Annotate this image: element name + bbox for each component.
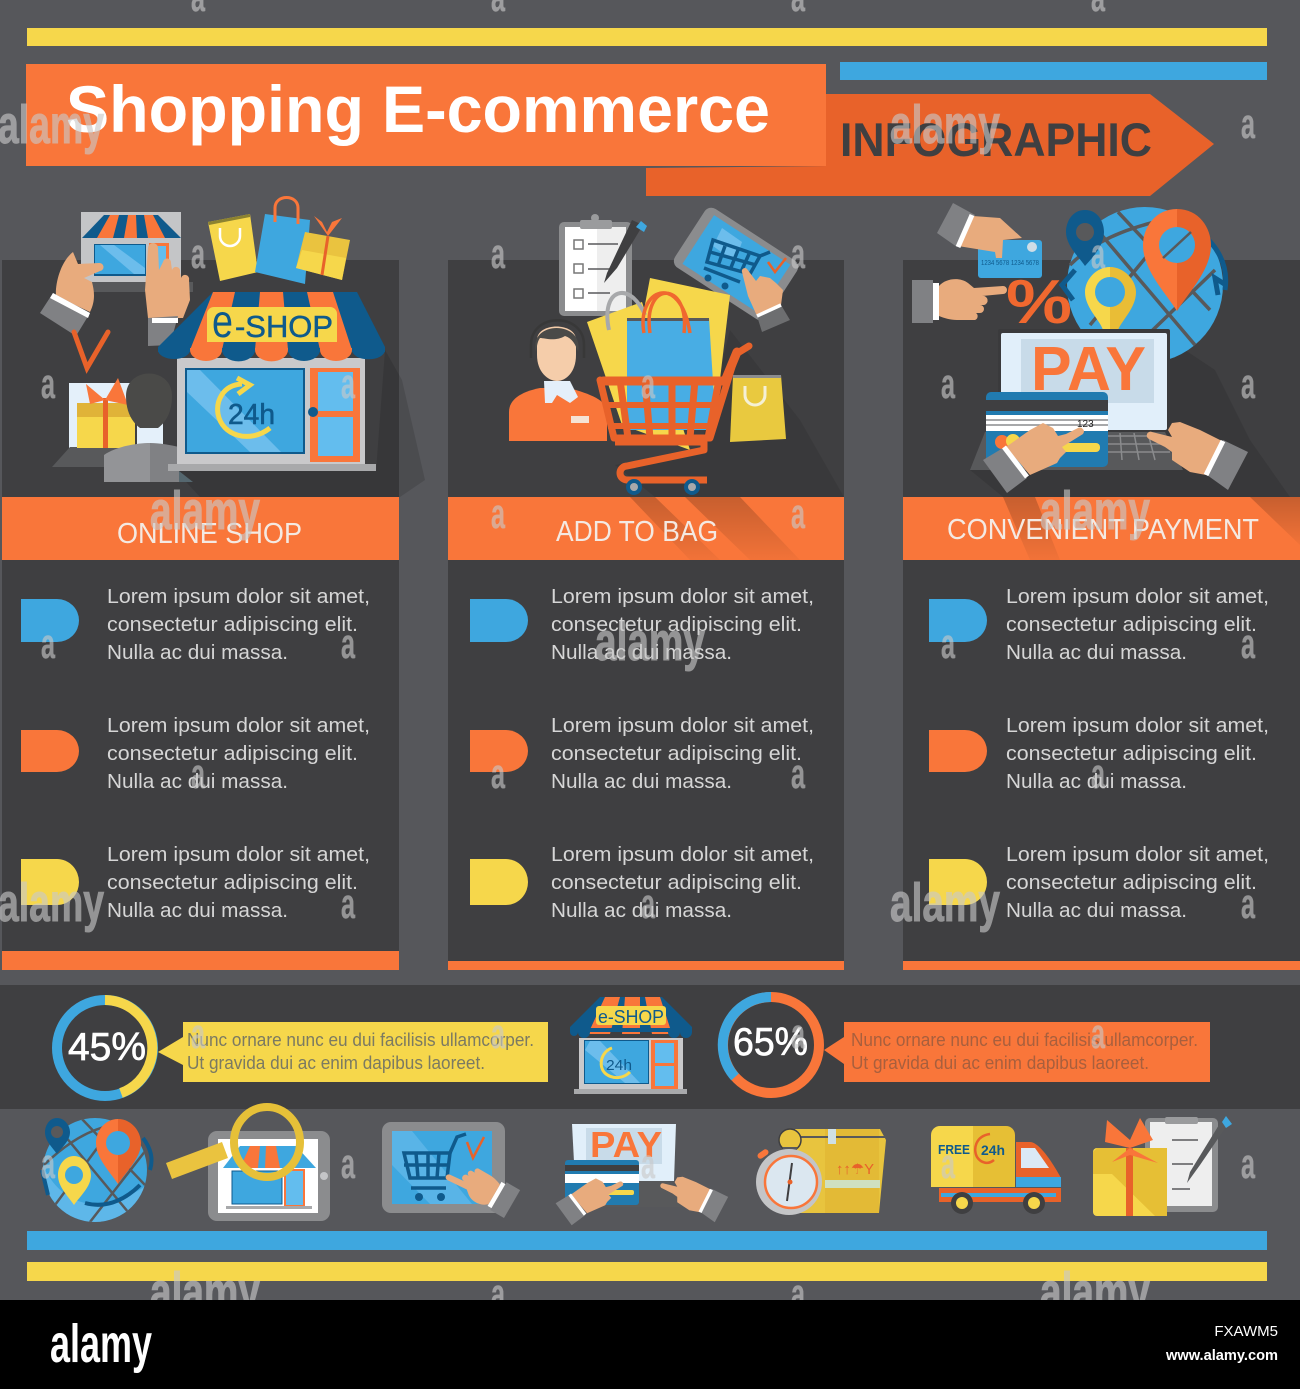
item 3 bbox=[21, 843, 370, 922]
watermark overlay: alamy bbox=[150, 1262, 260, 1322]
watermark overlay: alamy bbox=[890, 95, 1000, 155]
watermark overlay: a bbox=[1241, 620, 1255, 667]
watermark overlay: a bbox=[791, 1010, 805, 1057]
donut: 65%: 65% bbox=[733, 1021, 808, 1064]
icon: tablet with shop and hands bbox=[40, 212, 193, 346]
watermark overlay: a bbox=[341, 620, 355, 667]
percent sign: % bbox=[1006, 268, 1072, 337]
item 1 bbox=[21, 585, 370, 664]
icon: delivery truck bbox=[931, 1126, 1061, 1214]
icon: globe with pins bbox=[40, 1118, 152, 1230]
watermark overlay: a bbox=[1241, 880, 1255, 927]
bottom blue bar bbox=[27, 1231, 1267, 1250]
item 2: consectetur adipiscing elit. bbox=[107, 742, 358, 765]
title banner bbox=[26, 64, 826, 166]
icon: bank card bbox=[986, 392, 1108, 467]
illustration: add to bag bbox=[509, 205, 844, 497]
watermark overlay: a bbox=[791, 230, 805, 277]
illustration: convenient payment bbox=[912, 203, 1290, 497]
icon: pay laptop with card: PAY bbox=[590, 1124, 662, 1165]
icon: e-shop storefront: 24h bbox=[228, 399, 275, 431]
watermark overlay: a bbox=[191, 230, 205, 277]
icon: right hand bbox=[1147, 422, 1248, 490]
map pin blue bbox=[1066, 210, 1104, 266]
watermark overlay: a bbox=[41, 620, 55, 667]
icon: small e-shop: e-SHOP bbox=[598, 1007, 664, 1027]
item 1 bbox=[929, 585, 1269, 664]
icon: laptop with PAY bbox=[970, 329, 1183, 470]
item 3 bbox=[929, 843, 1269, 922]
top blue bar bbox=[840, 62, 1267, 80]
watermark overlay: a bbox=[941, 360, 955, 407]
item 1: Lorem ipsum dolor sit amet, bbox=[551, 585, 814, 608]
icon: shopping cart bbox=[600, 346, 749, 495]
icon: magnifier over tablet bbox=[169, 1107, 330, 1221]
item 3: Lorem ipsum dolor sit amet, bbox=[1006, 843, 1269, 866]
heading band: add to bag: ADD TO BAG bbox=[556, 516, 718, 548]
stats band bbox=[0, 985, 1300, 1109]
watermark overlay: a bbox=[341, 1140, 355, 1187]
watermark overlay: a bbox=[1091, 1010, 1105, 1057]
item 2 bbox=[929, 714, 1269, 793]
icon: pay laptop with card bbox=[556, 1124, 728, 1225]
callout: yellow bbox=[158, 1022, 548, 1082]
item 3: consectetur adipiscing elit. bbox=[107, 871, 358, 894]
long shadow bbox=[615, 330, 844, 497]
icon: delivery truck: 24h bbox=[981, 1142, 1005, 1158]
bottom yellow bar bbox=[27, 1262, 1267, 1281]
footer bar: FXAWM5 bbox=[1214, 1323, 1278, 1340]
heading band: convenient payment: CONVENIENT PAYMENT bbox=[947, 514, 1259, 546]
watermark overlay: a bbox=[491, 490, 505, 537]
icon: small e-shop: 24h bbox=[606, 1057, 632, 1074]
icon: yellow bag bbox=[730, 375, 786, 442]
item 1: Nulla ac dui massa. bbox=[107, 641, 288, 664]
icon: shopping bags and gift bbox=[208, 198, 350, 284]
item 1: Lorem ipsum dolor sit amet, bbox=[107, 585, 370, 608]
watermark overlay: a bbox=[491, 750, 505, 797]
watermark overlay: a bbox=[1241, 100, 1255, 147]
watermark overlay: a bbox=[1091, 750, 1105, 797]
icon: shopping bags bbox=[587, 278, 730, 450]
panel: online shop bbox=[2, 260, 399, 970]
watermark overlay: a bbox=[791, 1270, 805, 1317]
icon: bank card: 123 bbox=[1077, 419, 1094, 430]
item 2: Lorem ipsum dolor sit amet, bbox=[1006, 714, 1269, 737]
map pin orange bbox=[1143, 209, 1211, 311]
item 2: Lorem ipsum dolor sit amet, bbox=[107, 714, 370, 737]
watermark overlay: a bbox=[341, 360, 355, 407]
item 3: Nulla ac dui massa. bbox=[107, 899, 288, 922]
icon: laptop with PAY: PAY bbox=[1031, 335, 1146, 404]
item 1: Nulla ac dui massa. bbox=[551, 641, 732, 664]
watermark overlay: a bbox=[1241, 360, 1255, 407]
heading band: add to bag bbox=[448, 497, 844, 560]
watermark overlay: alamy bbox=[0, 95, 104, 155]
watermark overlay: a bbox=[641, 1140, 655, 1187]
callout: orange bbox=[824, 1022, 1210, 1082]
icon: customer at laptop with gift bbox=[52, 374, 193, 482]
illustration: online shop bbox=[40, 198, 425, 497]
footer bar bbox=[0, 1300, 1300, 1389]
icon: check mark bbox=[74, 332, 108, 368]
donut: 65% bbox=[723, 997, 819, 1093]
subtitle arrow banner: INFOGRAPHIC bbox=[840, 113, 1152, 166]
long shadow bbox=[176, 350, 425, 497]
watermark overlay: a bbox=[941, 1140, 955, 1187]
icon: delivery truck: FREE bbox=[938, 1142, 970, 1157]
top yellow bar bbox=[27, 28, 1267, 46]
watermark overlay: alamy bbox=[890, 873, 1000, 933]
subtitle arrow banner bbox=[646, 94, 1214, 196]
footer bar: alamy bbox=[50, 1314, 152, 1374]
item 2: Nulla ac dui massa. bbox=[1006, 770, 1187, 793]
shop sign bbox=[207, 295, 337, 347]
icon: tablet with cart bbox=[671, 205, 801, 332]
watermark overlay: alamy bbox=[1040, 481, 1150, 541]
watermark overlay: a bbox=[1241, 1140, 1255, 1187]
icon: call centre agent bbox=[509, 320, 607, 441]
watermark overlay: alamy bbox=[0, 873, 104, 933]
watermark overlay: a bbox=[41, 1140, 55, 1187]
watermark overlay: a bbox=[191, 750, 205, 797]
panel: convenient payment bbox=[903, 260, 1300, 970]
item 1: Nulla ac dui massa. bbox=[1006, 641, 1187, 664]
item 2 bbox=[470, 714, 814, 793]
icon: globe with map pins bbox=[1062, 207, 1226, 363]
icon row bbox=[40, 1107, 1232, 1230]
item 1: Lorem ipsum dolor sit amet, bbox=[1006, 585, 1269, 608]
watermark overlay: a bbox=[1091, 230, 1105, 277]
long shadow bbox=[970, 340, 1290, 497]
icon: stopwatch and parcel: ↑↑☂Y bbox=[836, 1161, 874, 1178]
item 3: Nulla ac dui massa. bbox=[1006, 899, 1187, 922]
icon: hands with credit card: 1234 5678 1234 5678 bbox=[981, 260, 1039, 267]
watermark overlay: a bbox=[641, 360, 655, 407]
watermark overlay: a bbox=[191, 1010, 205, 1057]
icon: gift and clipboard bbox=[1093, 1116, 1232, 1216]
heading band: online shop bbox=[2, 497, 399, 560]
icon: hands with credit card bbox=[912, 203, 1042, 323]
watermark overlay: alamy bbox=[150, 481, 260, 541]
item 3: Lorem ipsum dolor sit amet, bbox=[107, 843, 370, 866]
watermark overlay: alamy bbox=[595, 612, 705, 672]
item 3: Nulla ac dui massa. bbox=[551, 899, 732, 922]
item 2: Nulla ac dui massa. bbox=[551, 770, 732, 793]
item 2: Nulla ac dui massa. bbox=[107, 770, 288, 793]
watermark overlay: a bbox=[491, 1270, 505, 1317]
watermark overlay: a bbox=[791, 490, 805, 537]
callout: orange: Ut gravida dui ac enim dapibus laoreet. bbox=[851, 1052, 1149, 1073]
watermark overlay: a bbox=[41, 360, 55, 407]
item 1: consectetur adipiscing elit. bbox=[107, 613, 358, 636]
callout: yellow: Nunc ornare nunc eu dui facilisis ullamcorper. bbox=[187, 1029, 534, 1050]
icon: small e-shop bbox=[570, 997, 692, 1094]
watermark overlay: a bbox=[791, 750, 805, 797]
heading band: convenient payment bbox=[903, 497, 1300, 560]
item 3: consectetur adipiscing elit. bbox=[1006, 871, 1257, 894]
item 2 bbox=[21, 714, 370, 793]
shop sign: e bbox=[212, 295, 233, 347]
callout: orange: Nunc ornare nunc eu dui facilisis ullamcorper. bbox=[851, 1029, 1198, 1050]
item 1: consectetur adipiscing elit. bbox=[1006, 613, 1257, 636]
icon: e-shop storefront bbox=[158, 292, 385, 471]
watermark overlay: a bbox=[941, 620, 955, 667]
watermark overlay: a bbox=[641, 880, 655, 927]
watermark overlay: a bbox=[341, 880, 355, 927]
panel: add to bag bbox=[448, 260, 844, 970]
item 2: consectetur adipiscing elit. bbox=[551, 742, 802, 765]
map pin yellow bbox=[1085, 267, 1136, 330]
donut: 45%: 45% bbox=[68, 1026, 146, 1069]
watermark overlay: alamy bbox=[1040, 1262, 1150, 1322]
item 1 bbox=[470, 585, 814, 664]
item 2: Lorem ipsum dolor sit amet, bbox=[551, 714, 814, 737]
shop sign: -SHOP bbox=[235, 309, 333, 344]
item 1: consectetur adipiscing elit. bbox=[551, 613, 802, 636]
icon: stopwatch and parcel bbox=[756, 1129, 886, 1215]
item 3: Lorem ipsum dolor sit amet, bbox=[551, 843, 814, 866]
icon: clipboard and pen bbox=[559, 214, 647, 316]
icon: tablet with cart and hand bbox=[382, 1122, 520, 1219]
item 2: consectetur adipiscing elit. bbox=[1006, 742, 1257, 765]
watermark overlay: a bbox=[491, 1010, 505, 1057]
watermark overlay: a bbox=[491, 230, 505, 277]
item 3: consectetur adipiscing elit. bbox=[551, 871, 802, 894]
callout: yellow: Ut gravida dui ac enim dapibus laoreet. bbox=[187, 1052, 485, 1073]
item 3 bbox=[470, 843, 814, 922]
heading band: online shop: ONLINE SHOP bbox=[117, 518, 302, 550]
donut: 45% bbox=[57, 1000, 153, 1096]
icon: left hand bbox=[983, 423, 1084, 493]
title banner: Shopping E-commerce bbox=[66, 72, 770, 146]
footer bar: www.alamy.com bbox=[1165, 1347, 1278, 1364]
